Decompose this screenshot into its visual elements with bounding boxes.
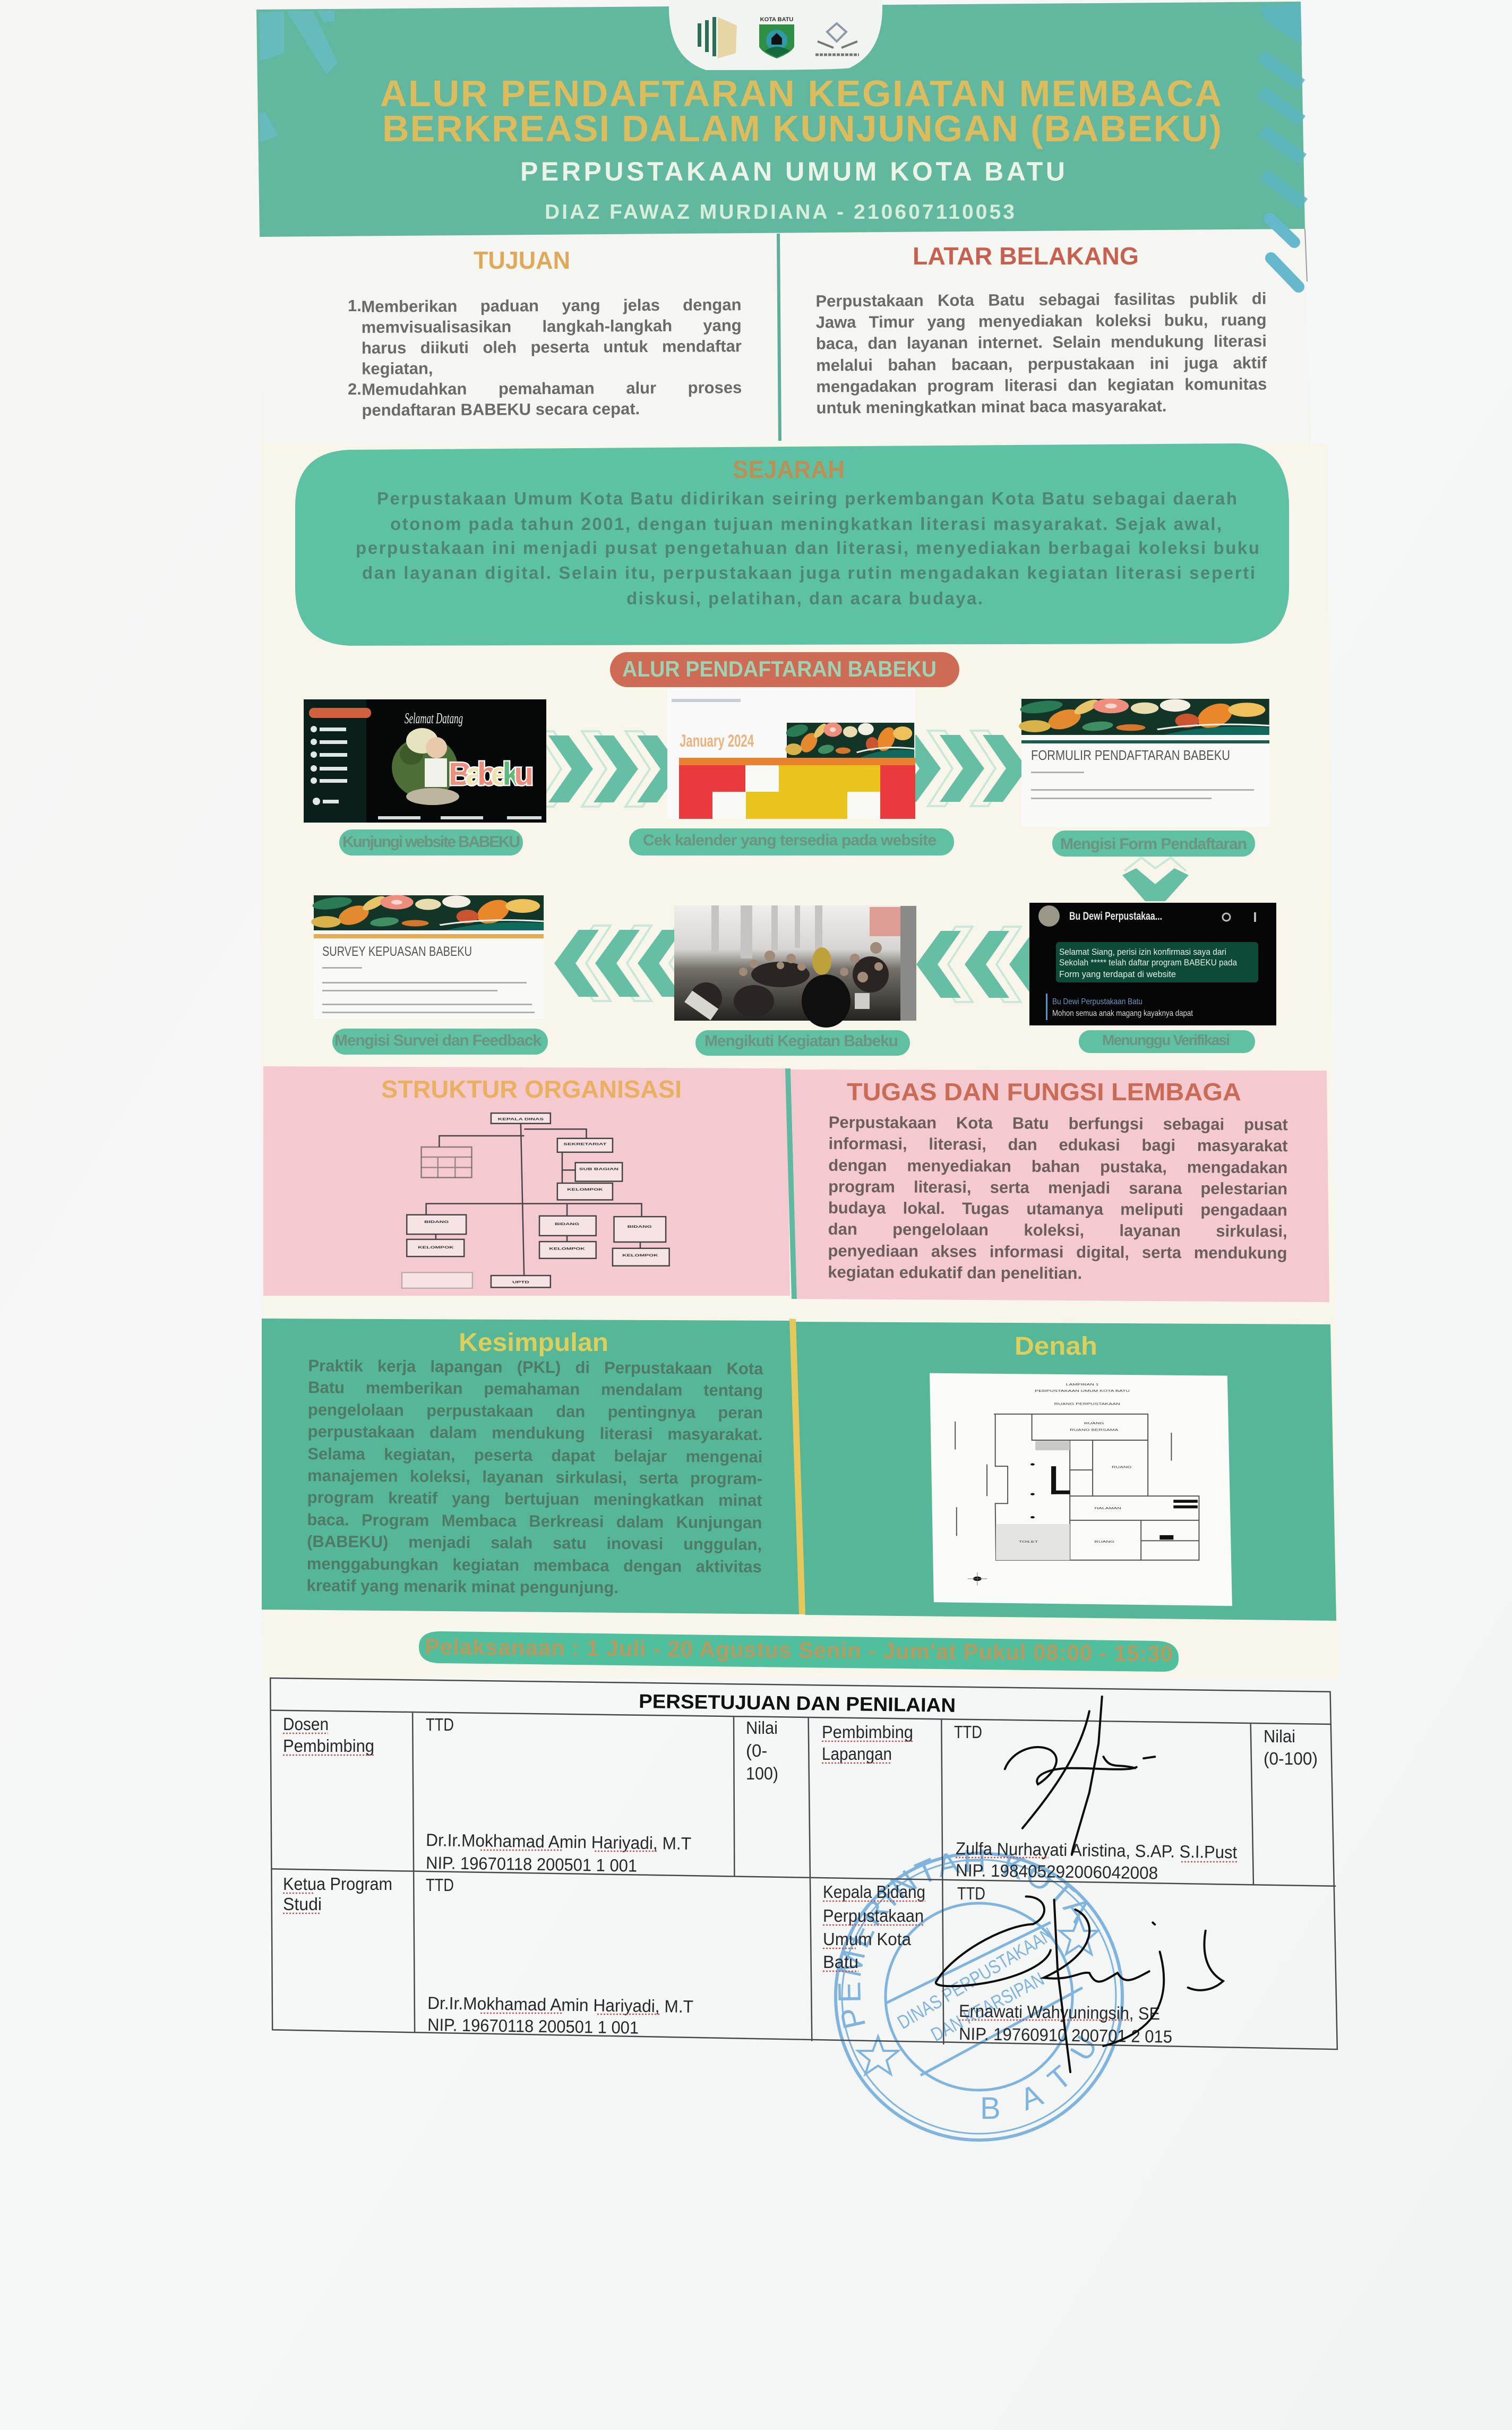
image: survey kepuasan xyxy=(308,895,544,1019)
panel: denah xyxy=(796,1322,1336,1621)
table text: Dr.Ir.Mokhamad Amin Hariyadi, M.T xyxy=(426,1830,691,1853)
text: kesimpulan body: kreatif yang menarik minat pengunjung. xyxy=(306,1576,618,1597)
image: kalender xyxy=(667,689,915,819)
org chart: KEPALA DINAS xyxy=(498,1117,544,1121)
image: survey kepuasan: SURVEY KEPUASAN BABEKU xyxy=(322,944,472,959)
org chart xyxy=(402,1113,669,1288)
text: latar belakang body: Perpustakaan Kota Batu sebagai fasilitas publik di xyxy=(815,289,1267,311)
logo: perpustakaan xyxy=(815,23,859,55)
text: tugas dan fungsi body: dengan menyediakan bahan pustaka, mengadakan xyxy=(828,1156,1287,1177)
header decorative stripes left xyxy=(259,11,338,142)
text: tujuan body: Memberikan paduan yang jelas dengan xyxy=(361,295,742,316)
label: step 4 xyxy=(1079,1030,1255,1053)
label: step 3: Mengisi Form Pendaftaran xyxy=(1060,835,1247,853)
text: latar belakang body xyxy=(815,288,1267,421)
org chart: BIDANG xyxy=(424,1220,449,1223)
table text: NIP. 198405292006042008 xyxy=(956,1860,1158,1883)
list numbers: 2. xyxy=(348,380,362,398)
image: foto kegiatan xyxy=(674,905,916,1028)
image: chat verifikasi: Bu Dewi Perpustakaa... xyxy=(1069,910,1162,922)
table text xyxy=(283,1714,1318,2047)
stamp: DAN KEARSIPAN xyxy=(927,1968,1047,2046)
text: sejarah body: dan layanan digital. Selain itu, perpustakaan juga rutin mengadakan kegiatan literasi seperti xyxy=(362,563,1255,583)
panel: sejarah xyxy=(295,443,1289,646)
heading: denah: Denah xyxy=(1015,1332,1097,1361)
text: tugas dan fungsi body: penyediaan akses informasi digital, serta mendukung xyxy=(828,1242,1287,1262)
org chart: SEKRETARIAT xyxy=(563,1142,607,1146)
title xyxy=(380,73,1222,149)
stamp xyxy=(834,1850,1124,2142)
text: kesimpulan body: manajemen koleksi, layanan sirkulasi, serta program- xyxy=(307,1466,762,1488)
label: step 6: Mengisi Survei dan Feedback xyxy=(334,1032,542,1049)
text: tujuan body: Memudahkan pemahaman alur proses xyxy=(362,378,742,399)
table text: (0-100) xyxy=(1264,1749,1318,1768)
text: tugas dan fungsi body xyxy=(828,1112,1288,1289)
heading: kesimpulan: Kesimpulan xyxy=(459,1329,608,1357)
table grid xyxy=(270,1678,1337,2049)
org chart: KELOMPOK xyxy=(567,1187,603,1191)
text: sejarah body: diskusi, pelatihan, dan acara budaya. xyxy=(626,588,983,608)
logo: kota batu crest xyxy=(759,16,794,58)
table text: TTD xyxy=(957,1884,985,1903)
poster cream background xyxy=(260,444,1339,1678)
title: ALUR PENDAFTARAN KEGIATAN MEMBACA xyxy=(380,73,1222,114)
image: chat verifikasi: Bu Dewi Perpustakaan Batu xyxy=(1052,997,1142,1006)
org chart: SUB BAGIAN xyxy=(579,1167,618,1171)
floor plan: RUANG xyxy=(1084,1421,1104,1425)
text: kesimpulan body: pengelolaan perpustakaan dan pentingnya peran xyxy=(308,1400,763,1422)
floor plan: RUANG PERPUSTAKAAN xyxy=(1054,1402,1120,1406)
floor plan: PERPUSTAKAAN UMUM KOTA BATU xyxy=(1035,1389,1130,1392)
divider tujuan and latar belakang xyxy=(778,234,780,441)
list numbers: 1. xyxy=(348,296,362,315)
text: sejarah body: perpustakaan ini menjadi pusat pengetahuan dan literasi, menyediakan berbagai koleksi buku xyxy=(356,538,1259,558)
text: kesimpulan body: Selama kegiatan, peserta dapat belajar mengenai xyxy=(307,1444,762,1466)
stamp: PEMERINTAH KOTA xyxy=(838,1850,1087,2029)
arrow: step 1 to 2 xyxy=(537,731,682,807)
table text: Perpustakaan xyxy=(823,1906,924,1926)
label: step 2: Cek kalender yang tersedia pada website xyxy=(643,832,937,849)
subtitle: PERPUSTAKAAN UMUM KOTA BATU xyxy=(520,157,1065,186)
text: kesimpulan body: (BABEKU) menjadi salah satu inovasi unggulan, xyxy=(307,1532,762,1554)
table text: NIP. 19760910 200701 2 015 xyxy=(959,2024,1172,2047)
image: chat verifikasi: Form yang terdapat di website xyxy=(1059,969,1176,979)
text: latar belakang body: melalui bahan bacaan, perpustakaan ini juga aktif xyxy=(816,353,1267,374)
divider kesimpulan and denah xyxy=(789,1319,805,1614)
stamp: DINAS PERPUSTAKAAN xyxy=(894,1923,1057,2033)
table text: Ernawati Wahyuningsih, SE xyxy=(959,2001,1160,2023)
heading pill: alur pendaftaran babeku xyxy=(610,652,959,687)
text: kesimpulan body xyxy=(306,1355,763,1602)
table text: Umum Kota xyxy=(823,1929,912,1949)
signature: pembimbing lapangan xyxy=(1005,1697,1155,1854)
org chart: KELOMPOK xyxy=(622,1253,658,1257)
text: latar belakang body: baca, dan layanan internet. Selain mendukung literasi xyxy=(816,332,1267,353)
label: step 3 xyxy=(1052,831,1255,857)
table: persetujuan dan penilaian xyxy=(270,1678,1337,2049)
text: tujuan body: harus diikuti oleh peserta untuk mendaftar xyxy=(362,337,742,357)
panel: kesimpulan xyxy=(262,1319,800,1614)
panel: tujuan and latar belakang background xyxy=(260,227,1311,445)
heading: struktur organisasi: STRUKTUR ORGANISASI xyxy=(381,1075,682,1103)
text: latar belakang body: mengadakan program literasi dan kegiatan komunitas xyxy=(816,374,1267,396)
text: tugas dan fungsi body: Perpustakaan Kota Batu berfungsi sebagai pusat xyxy=(829,1113,1288,1134)
image: formulir pendaftaran xyxy=(1015,698,1269,827)
text: latar belakang body: untuk meningkatkan minat baca masyarakat. xyxy=(817,397,1167,417)
text: sejarah body xyxy=(356,489,1259,608)
heading: sejarah: SEJARAH xyxy=(733,456,845,483)
image: kalender: January 2024 xyxy=(680,731,754,750)
floor plan: RUANG xyxy=(1112,1465,1132,1469)
header decorative stripes right xyxy=(1259,3,1304,204)
label: step 6 xyxy=(332,1029,548,1055)
label: step 1: Kunjungi website BABEKU xyxy=(342,833,520,851)
text: tugas dan fungsi body: budaya lokal. Tugas utamanya meliputi pengadaan xyxy=(828,1199,1287,1219)
text: tujuan body xyxy=(361,294,742,424)
table text: Ketua Program xyxy=(283,1874,392,1894)
floor plan: HALAMAN xyxy=(1095,1506,1121,1510)
image: website babeku: Selamat Datang xyxy=(405,711,463,727)
image: formulir pendaftaran: FORMULIR PENDAFTARAN BABEKU xyxy=(1031,747,1230,763)
table title: PERSETUJUAN DAN PENILAIAN xyxy=(639,1690,956,1716)
spellcheck underlines xyxy=(283,1733,1237,2020)
text: kesimpulan body: Praktik kerja lapangan (PKL) di Perpustakaan Kota xyxy=(308,1356,763,1378)
table text: Dr.Ir.Mokhamad Amin Hariyadi, M.T xyxy=(427,1993,693,2016)
table text: 100) xyxy=(746,1764,778,1783)
text: kesimpulan body: program kreatif yang bertujuan meningkatkan minat xyxy=(307,1488,762,1510)
table text: (0- xyxy=(746,1741,767,1760)
text: latar belakang body: Jawa Timur yang menyediakan koleksi buku, ruang xyxy=(816,311,1267,332)
table text: Nilai xyxy=(746,1718,778,1738)
header banner xyxy=(256,0,1307,287)
image: chat verifikasi xyxy=(1029,903,1276,1025)
floor plan: RUANG xyxy=(1094,1540,1114,1543)
text: tugas dan fungsi body: dan pengelolaan koleksi, layanan sirkulasi, xyxy=(828,1220,1287,1241)
text: tugas dan fungsi body: kegiatan edukatif dan penelitian. xyxy=(828,1263,1082,1282)
heading: tujuan: TUJUAN xyxy=(474,246,570,274)
table text: Dosen xyxy=(283,1714,329,1734)
label: step 2 xyxy=(629,828,954,855)
panel: struktur organisasi xyxy=(263,1066,790,1296)
arrow: step 2 to 3 xyxy=(884,731,1027,806)
heading pill: alur pendaftaran babeku: ALUR PENDAFTARAN BABEKU xyxy=(622,656,937,681)
org chart: BIDANG xyxy=(628,1225,652,1229)
table text: Kepala Bidang xyxy=(823,1882,925,1902)
panel: latar belakang xyxy=(815,242,1267,421)
pill: pelaksanaan: Pelaksanaan : 1 Juli - 20 Agustus Senin - Jum'at Pukul 08:00 - 15:30 xyxy=(425,1634,1173,1666)
org chart: KELOMPOK xyxy=(418,1245,454,1249)
text: kesimpulan body: baca. Program Membaca Berkreasi dalam Kunjungan xyxy=(307,1510,762,1532)
table text: NIP. 19670118 200501 1 001 xyxy=(427,2015,639,2038)
text: tugas dan fungsi body: program literasi, serta menjadi sarana pelestarian xyxy=(828,1177,1287,1198)
arrow: step 4 to 5 xyxy=(916,927,1066,1002)
floor plan: RUANG BERSAMA xyxy=(1070,1428,1119,1432)
label: step 1 xyxy=(339,829,523,855)
text: tujuan body: pendaftaran BABEKU secara cepat. xyxy=(362,399,640,420)
table text: Studi xyxy=(283,1894,322,1914)
list numbers xyxy=(348,296,362,398)
image: website babeku xyxy=(304,699,546,823)
table text: Lapangan xyxy=(822,1744,892,1764)
table text: Pembimbing xyxy=(283,1736,374,1756)
floor plan: LAMPIRAN 1 xyxy=(1066,1383,1099,1386)
divider pink panels xyxy=(785,1068,797,1299)
table text: NIP. 19670118 200501 1 001 xyxy=(426,1853,637,1876)
table text: Pembimbing xyxy=(822,1722,913,1742)
image: chat verifikasi: Mohon semua anak magang kayaknya dapat xyxy=(1052,1009,1193,1018)
text: sejarah body: otonom pada tahun 2001, dengan tujuan meningkatkan literasi masyarakat. Sejak awal, xyxy=(390,514,1222,534)
heading: latar belakang: LATAR BELAKANG xyxy=(913,242,1139,270)
floor plan: TOILET xyxy=(1019,1540,1038,1543)
logo tab xyxy=(669,0,882,70)
image: website babeku: Babeku xyxy=(449,756,534,792)
signature: kepala bidang xyxy=(936,1896,1223,2072)
image: chat verifikasi: Selamat Siang, perisi izin konfirmasi saya dari xyxy=(1059,947,1226,957)
org chart: UPTD xyxy=(512,1280,529,1284)
logo: kota batu crest: KOTA BATU xyxy=(760,16,793,23)
text: kesimpulan body: menggabungkan kegiatan membaca dengan aktivitas xyxy=(307,1554,762,1576)
table text: Zulfa Nurhayati Aristina, S.AP. S.I.Pust xyxy=(956,1838,1237,1862)
image: chat verifikasi: Sekolah ***** telah daftar program BABEKU pada xyxy=(1059,957,1237,968)
text: kesimpulan body: perpustakaan dalam mendukung literasi masyarakat. xyxy=(307,1422,763,1444)
arrow: step 5 to 6 xyxy=(554,926,694,1001)
org chart: BIDANG xyxy=(555,1222,579,1226)
panel: tugas dan fungsi lembaga xyxy=(791,1069,1329,1302)
table text: TTD xyxy=(954,1722,982,1742)
arrow: step 3 to 4 xyxy=(1122,858,1189,901)
text: sejarah body: Perpustakaan Umum Kota Batu didirikan seiring perkembangan Kota Batu sebagai daerah xyxy=(377,489,1237,508)
text: tujuan body: memvisualisasikan langkah-langkah yang xyxy=(362,316,742,337)
table text: Batu xyxy=(823,1952,858,1972)
text: kesimpulan body: Batu memberikan pemahaman mendalam tentang xyxy=(308,1378,763,1400)
table text: TTD xyxy=(426,1875,454,1895)
panel: tujuan xyxy=(348,246,742,424)
title: BERKREASI DALAM KUNJUNGAN (BABEKU) xyxy=(382,108,1222,149)
stamp: BATU xyxy=(980,2030,1104,2126)
org chart: KELOMPOK xyxy=(549,1247,585,1251)
label: step 4: Menunggu Verifikasi xyxy=(1102,1032,1230,1048)
label: step 5 xyxy=(695,1030,910,1056)
heading: tugas dan fungsi lembaga: TUGAS DAN FUNGSI LEMBAGA xyxy=(847,1078,1241,1106)
table text: TTD xyxy=(426,1715,454,1734)
table text: Nilai xyxy=(1264,1726,1295,1746)
floor plan xyxy=(930,1373,1232,1606)
text: tugas dan fungsi body: informasi, literasi, dan edukasi bagi masyarakat xyxy=(828,1134,1288,1156)
author: DIAZ FAWAZ MURDIANA - 210607110053 xyxy=(545,201,1015,224)
text: tujuan body: kegiatan, xyxy=(362,359,433,378)
label: step 5: Mengikuti Kegiatan Babeku xyxy=(705,1032,898,1050)
logo: university xyxy=(698,17,737,58)
